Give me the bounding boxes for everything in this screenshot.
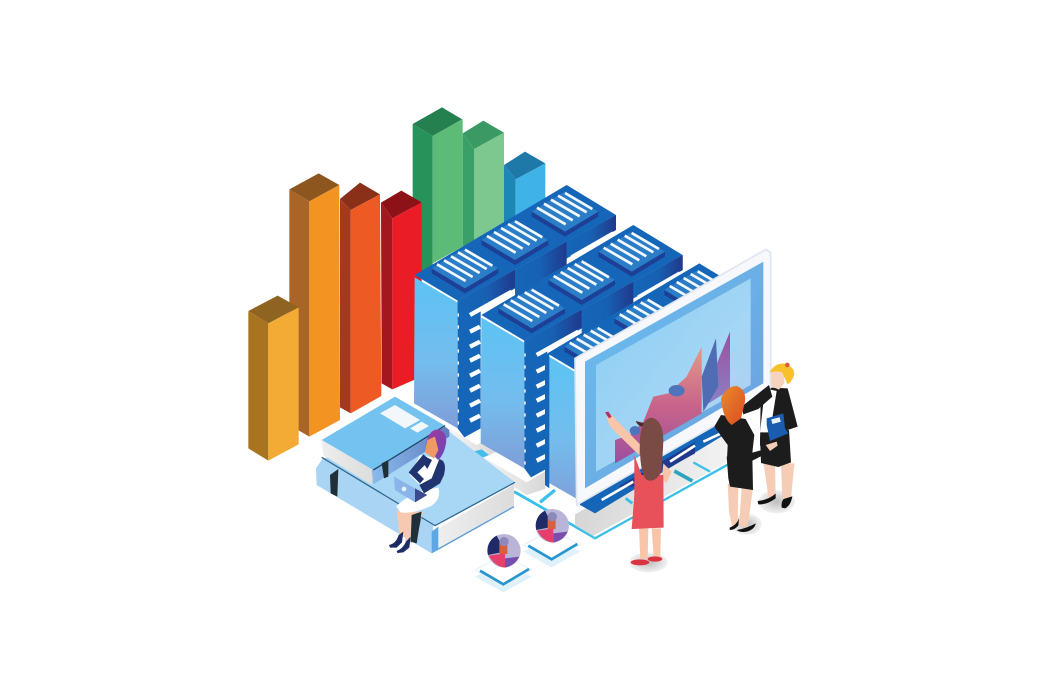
books with seated woman: [316, 397, 515, 553]
server row 2: [481, 225, 683, 477]
three standing women: [605, 363, 798, 572]
bar: red: [381, 191, 422, 389]
pie chart podium 1: [475, 534, 532, 592]
bar: green: [413, 107, 463, 277]
floor platform under servers: [449, 428, 590, 535]
bar: orange: [289, 173, 340, 437]
screen: [596, 278, 751, 472]
area chart: [615, 332, 730, 463]
bar: red-orange: [340, 183, 381, 413]
monitor base and floor: [515, 415, 728, 538]
woman in blonde hair, black suit: [742, 363, 798, 513]
server row 3: [545, 263, 749, 516]
monitor bezel: [585, 262, 763, 488]
bar: yellow: [248, 296, 299, 461]
monitor frame: [575, 249, 771, 505]
bar chart: isometric 3D columns: [248, 107, 545, 461]
woman with laptop: [389, 429, 446, 553]
server row 1: [414, 185, 616, 437]
bar: light blue: [504, 152, 545, 223]
woman in red dress, pointing at screen: [605, 412, 672, 572]
small book: [322, 397, 449, 485]
woman with orange hair, black suit: [714, 386, 778, 535]
large book: [316, 428, 515, 553]
bar: light green: [463, 121, 504, 247]
server racks: [414, 185, 749, 516]
monitor with area chart: [575, 249, 771, 505]
pie chart podium 2: [523, 509, 580, 567]
